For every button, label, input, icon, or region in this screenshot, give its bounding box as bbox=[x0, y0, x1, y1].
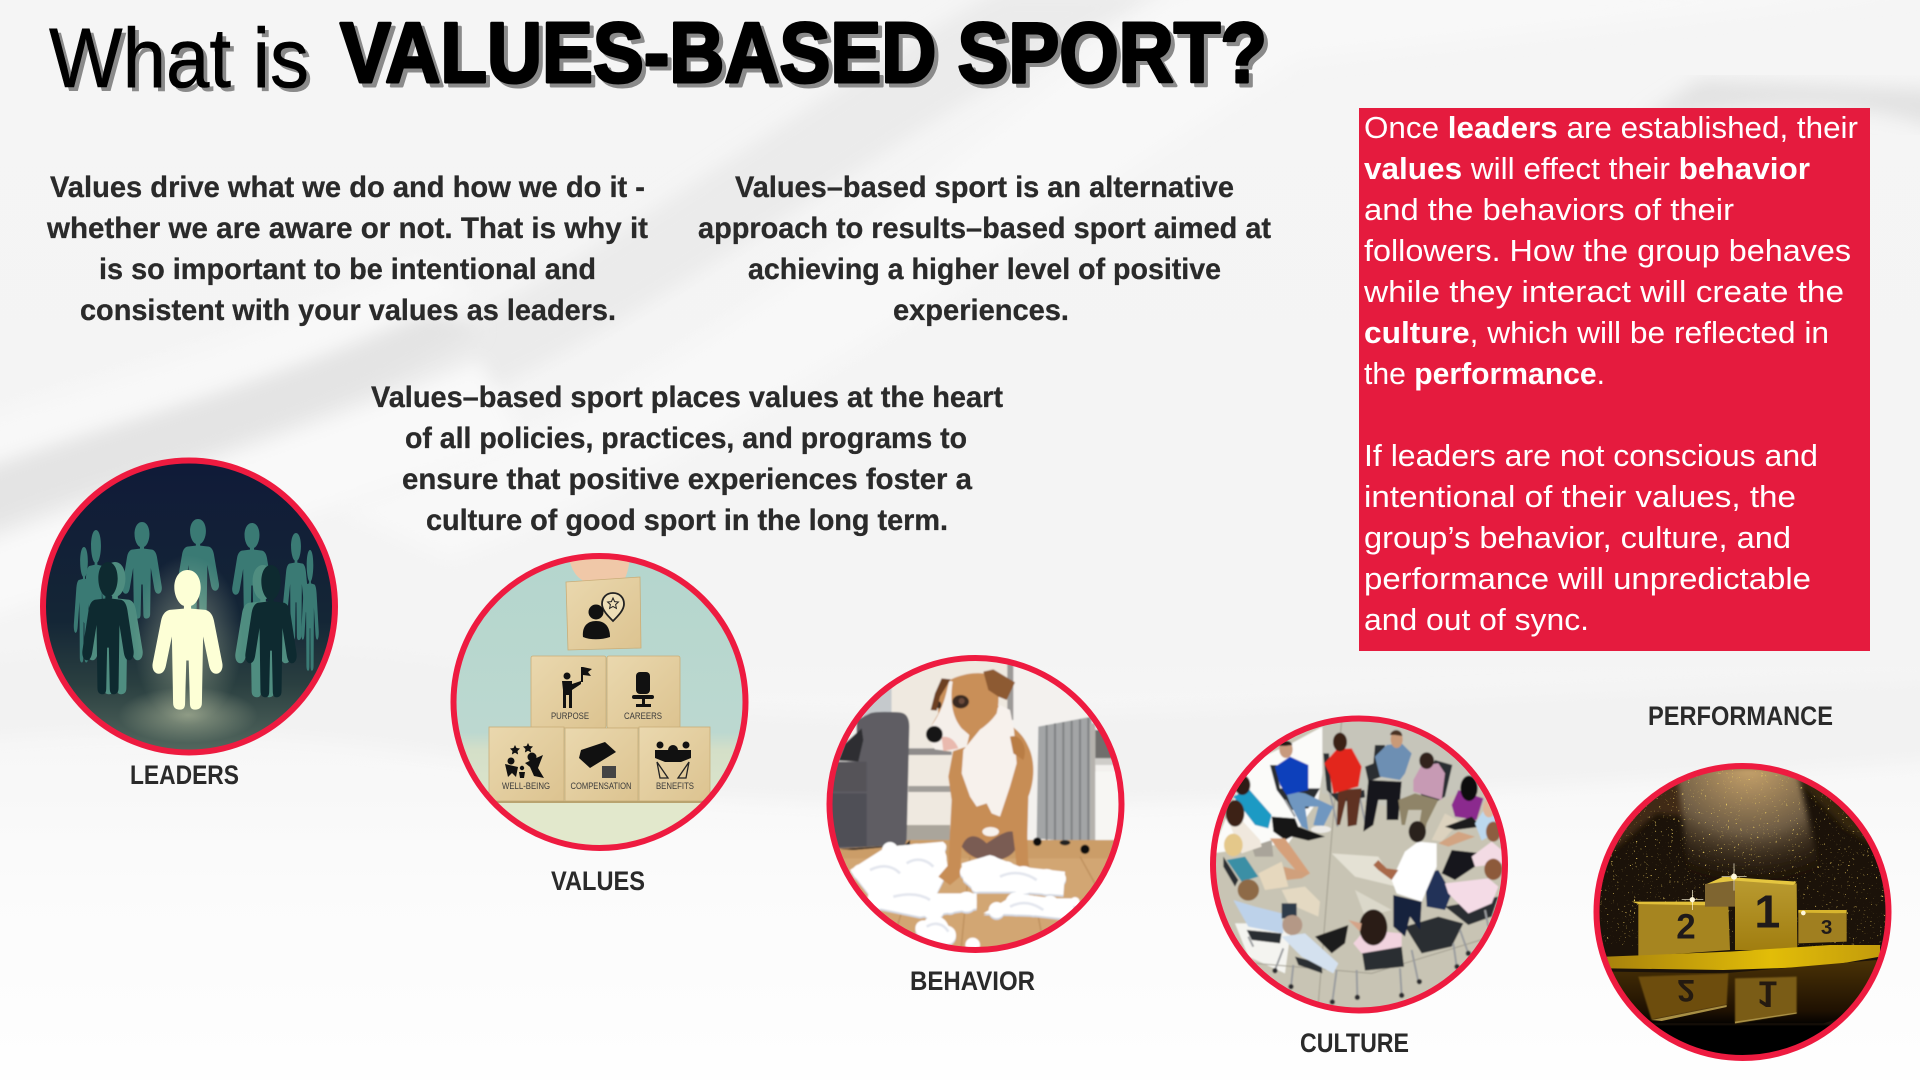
title: values-based sport: VALUES-BASED SPORT? bbox=[340, 6, 1267, 101]
text block: values at the heart bbox=[371, 381, 1003, 537]
dog body bbox=[948, 706, 1034, 872]
text: once leaders bbox=[1363, 110, 1858, 391]
text block: alternative approach: approach to results–based sport aimed at bbox=[698, 212, 1271, 245]
image: performance podium: 2 bbox=[1677, 973, 1695, 1009]
dog head bbox=[928, 673, 999, 752]
text: if leaders: performance will unpredictable bbox=[1364, 561, 1811, 596]
text: once leaders: culture, which will be reflected in bbox=[1364, 315, 1829, 350]
text block: values at the heart: ensure that positive experiences foster a bbox=[402, 463, 972, 496]
image: values blocks: CAREERS bbox=[624, 711, 662, 721]
text: if leaders: intentional of their values, the bbox=[1364, 479, 1796, 514]
text block: values at the heart: of all policies, practices, and programs to bbox=[405, 422, 967, 455]
sofa bbox=[827, 712, 909, 848]
text: once leaders: followers. How the group behaves bbox=[1364, 233, 1851, 268]
title: values-based sport: VALUES-BASED SPORT? bbox=[344, 10, 1271, 105]
text block: values drive: is so important to be intentional and bbox=[99, 253, 596, 286]
text: if leaders: If leaders are not conscious and bbox=[1364, 438, 1818, 473]
image: performance podium: 2 bbox=[1676, 907, 1696, 946]
text block: alternative approach: experiences. bbox=[893, 294, 1069, 327]
text: once leaders: values will effect their behavior bbox=[1364, 151, 1810, 186]
label: leaders: LEADERS bbox=[130, 760, 239, 790]
image: leaders bbox=[40, 457, 338, 756]
image: values blocks: BENEFITS bbox=[656, 781, 694, 791]
image: performance podium: 3 bbox=[1821, 916, 1832, 939]
podium bbox=[1638, 903, 1730, 957]
gold dust bbox=[1600, 770, 1886, 946]
text: once leaders: Once leaders are established, their bbox=[1364, 110, 1858, 145]
title bbox=[49, 6, 1271, 109]
image: culture circle bbox=[1205, 710, 1515, 1020]
text block: values drive: consistent with your values as leaders. bbox=[80, 294, 616, 327]
cotton stuffing bbox=[850, 848, 1076, 946]
title: what is: What is bbox=[49, 11, 309, 105]
text block: values drive: whether we are aware or not. That is why it bbox=[46, 212, 648, 245]
label: behavior: BEHAVIOR bbox=[910, 966, 1035, 996]
people bbox=[1285, 790, 1333, 830]
text: once leaders: the performance. bbox=[1364, 356, 1605, 391]
image: values blocks: WELL-BEING bbox=[502, 781, 550, 791]
text block: values at the heart: culture of good sport in the long term. bbox=[426, 504, 948, 537]
text: once leaders: while they interact will create the bbox=[1363, 274, 1844, 309]
label: performance: PERFORMANCE bbox=[1648, 701, 1833, 731]
text block: alternative approach: achieving a higher level of positive bbox=[748, 253, 1221, 286]
text block: alternative approach: Values–based sport is an alternative bbox=[735, 171, 1234, 204]
image: values blocks: COMPENSATION bbox=[570, 781, 632, 791]
text block: values drive bbox=[46, 171, 648, 327]
image: performance podium: 1 bbox=[1757, 974, 1778, 1015]
text: once leaders: and the behaviors of their bbox=[1364, 192, 1734, 227]
text: if leaders: and out of sync. bbox=[1364, 602, 1589, 637]
image: performance podium bbox=[1590, 760, 1895, 1065]
panel: red explanation box bbox=[1359, 108, 1870, 651]
title: what is: What is bbox=[53, 15, 313, 109]
text block: values drive: Values drive what we do and how we do it - bbox=[50, 171, 645, 204]
text: if leaders bbox=[1364, 438, 1818, 637]
label: culture: CULTURE bbox=[1300, 1028, 1409, 1058]
chairs bbox=[1223, 745, 1498, 973]
text block: alternative approach bbox=[698, 171, 1271, 327]
image: performance podium: 1 bbox=[1754, 886, 1780, 938]
image: values blocks: PURPOSE bbox=[551, 711, 589, 721]
text block: values at the heart: Values–based sport places values at the heart bbox=[371, 381, 1003, 414]
label: values: VALUES bbox=[551, 866, 645, 896]
image: values blocks bbox=[450, 550, 750, 852]
text: if leaders: group’s behavior, culture, and bbox=[1364, 520, 1791, 555]
image: behavior dog bbox=[820, 650, 1130, 960]
